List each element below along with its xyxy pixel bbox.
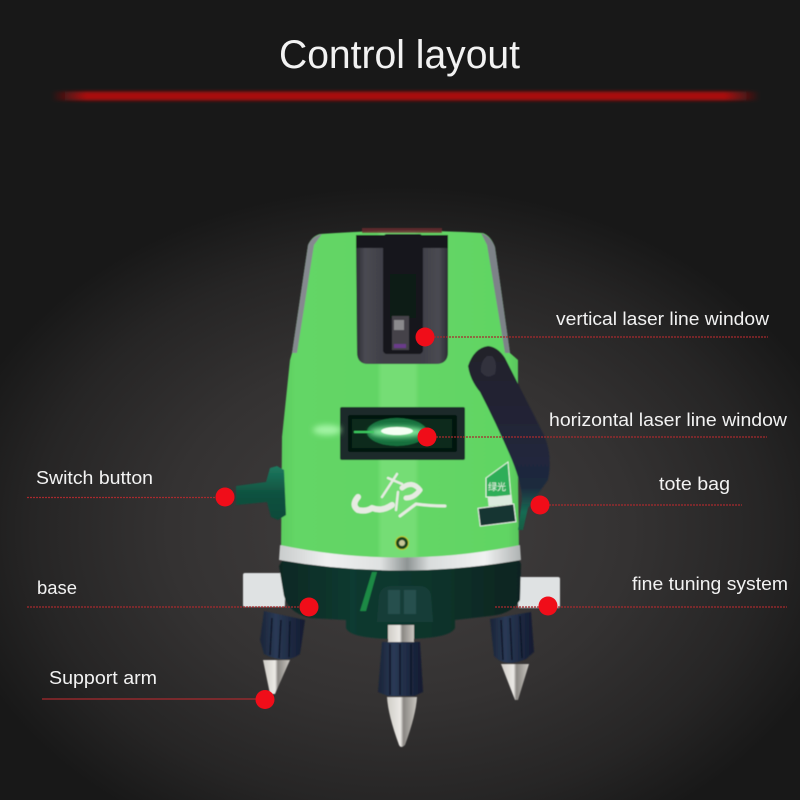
- label: switch button: [27, 468, 234, 506]
- chrome ring: [279, 545, 521, 570]
- label: tote bag: tote bag: [659, 474, 730, 494]
- green glow left of window: [313, 425, 341, 435]
- label: support arm: Support arm: [49, 668, 157, 688]
- label: support arm: [42, 668, 274, 709]
- label: tote bag: [530, 474, 742, 514]
- body: [281, 231, 519, 563]
- laser level device: [236, 228, 560, 747]
- switch button: [236, 466, 286, 520]
- label: horizontal laser line window: [418, 410, 788, 446]
- title red underline: [51, 92, 760, 100]
- logo: [354, 474, 445, 516]
- label: horizontal laser line window: horizontal laser line window: [549, 410, 788, 430]
- tote strap: [468, 346, 550, 530]
- support arm: right foot: [490, 612, 534, 700]
- grey edge of top: [292, 234, 322, 353]
- vertical window recess: [356, 236, 448, 364]
- label: vertical laser line window: vertical laser line window: [556, 309, 770, 329]
- label: base: [27, 578, 318, 616]
- sticker: 绿光: [488, 481, 506, 492]
- title: Control layout: [279, 33, 520, 77]
- level screw: [396, 536, 408, 550]
- label: fine tuning system: fine tuning system: [632, 574, 788, 594]
- support arm: left foot: [260, 611, 305, 694]
- label: fine tuning system: [495, 574, 788, 616]
- device base plate: [243, 556, 560, 639]
- label: base: base: [37, 578, 77, 598]
- label: switch button: Switch button: [36, 468, 153, 488]
- label: vertical laser line window: [416, 309, 770, 346]
- horizontal window: [340, 407, 465, 460]
- sticker: [478, 462, 516, 526]
- support arm: centre foot: [378, 625, 423, 747]
